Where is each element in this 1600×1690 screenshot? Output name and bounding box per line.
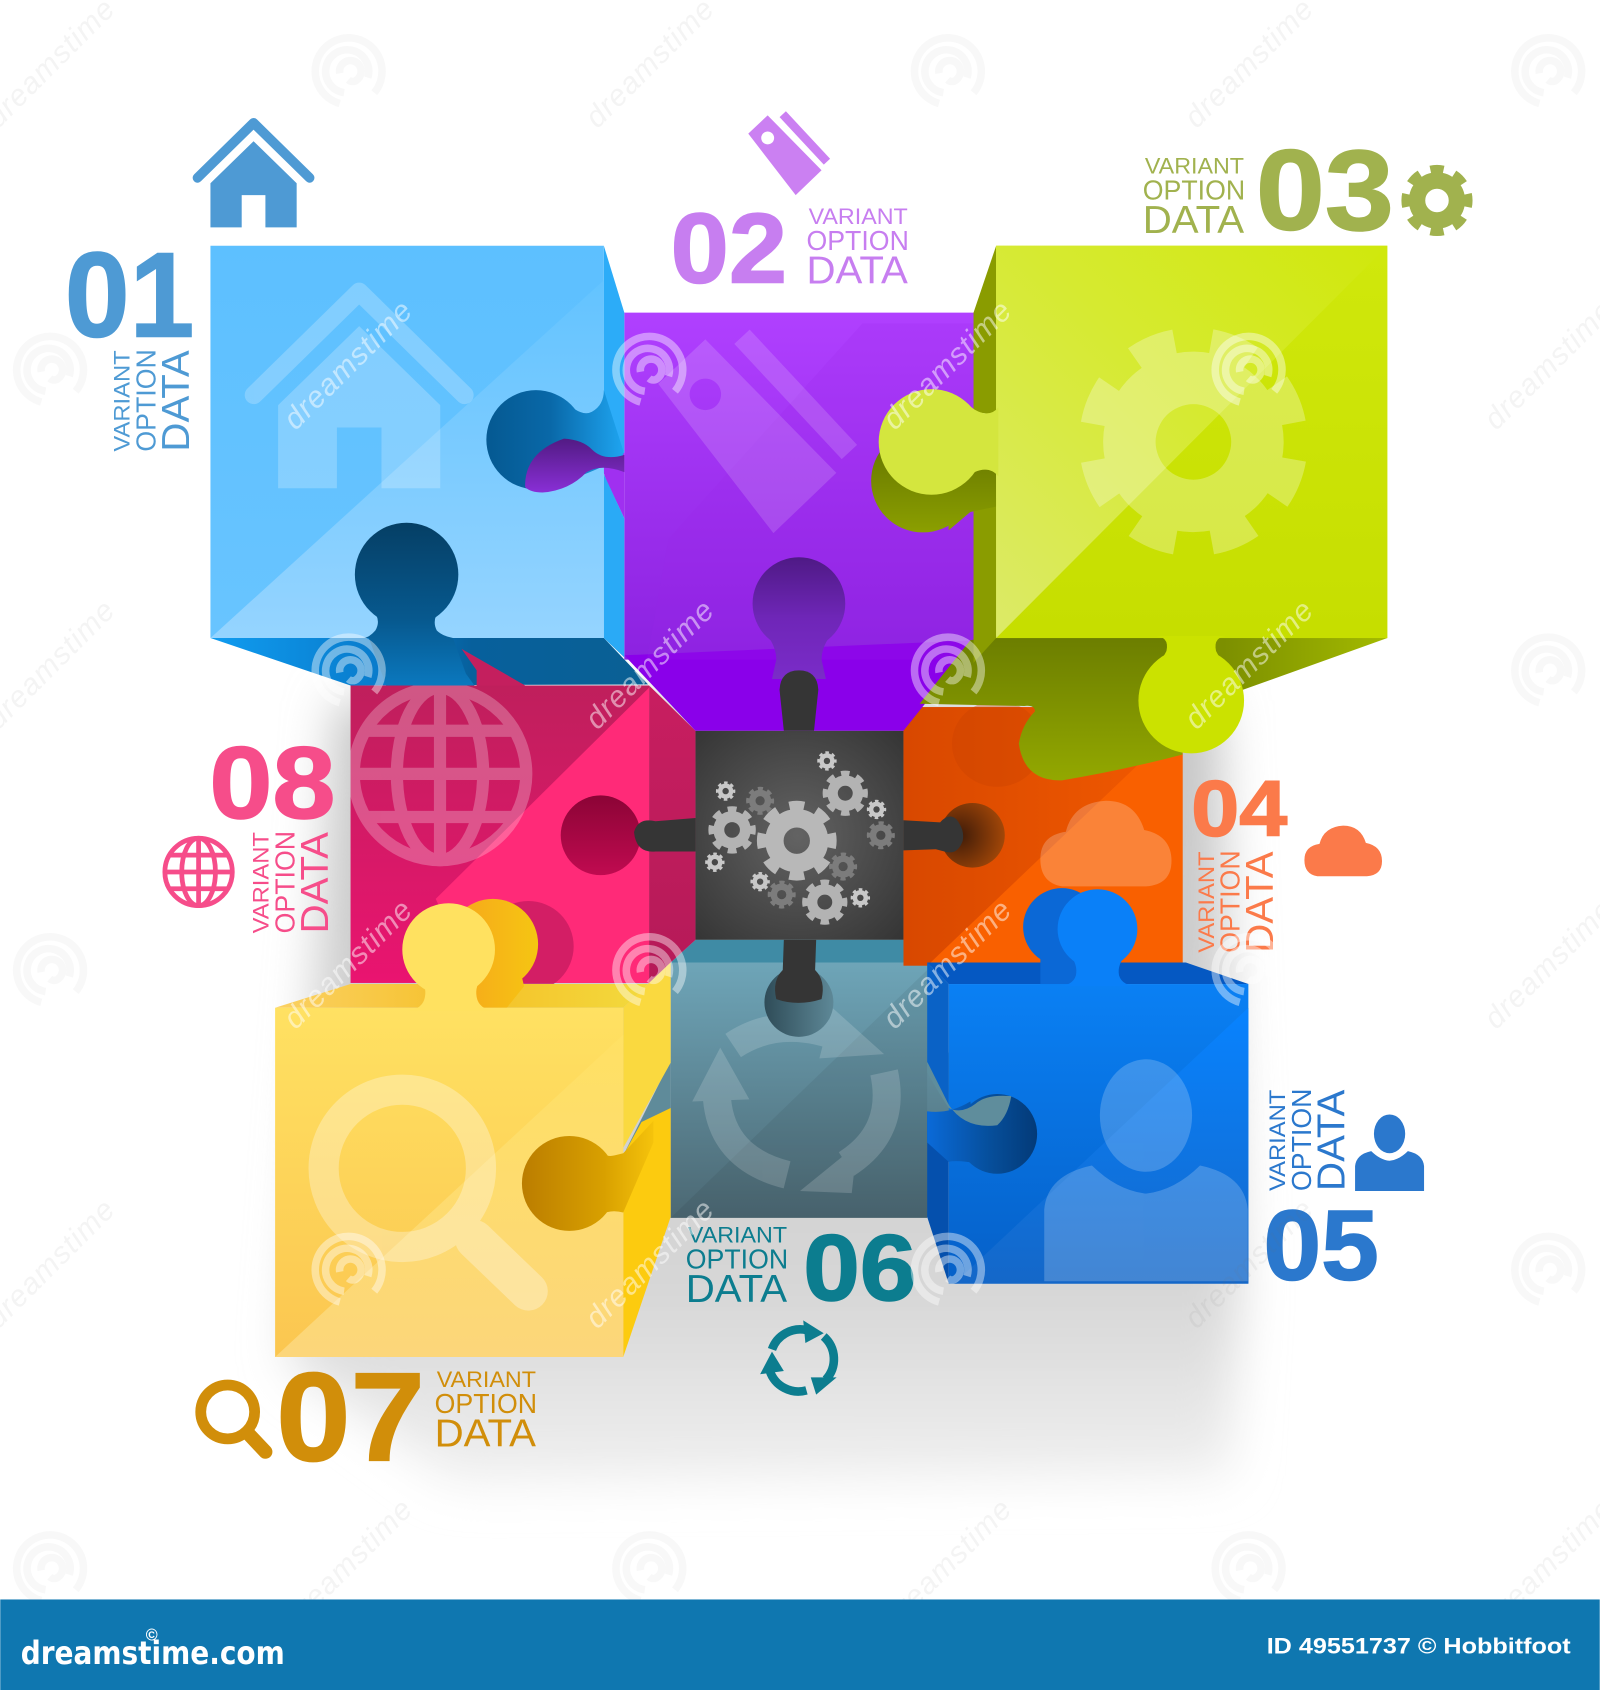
puzzle infographic: dreamstime — [579, 593, 721, 736]
label 08 — [249, 831, 337, 933]
panel: piece 07 yellow — [275, 899, 671, 1357]
footer credit: ID 49551737 © Hobbitfoot — [1267, 1633, 1571, 1658]
label 04: DATA — [1239, 851, 1282, 953]
puzzle infographic: dreamstime — [1178, 593, 1321, 736]
label 03: VARIANT — [1145, 154, 1244, 179]
icon: magnifier — [201, 1385, 265, 1452]
socket: bottom — [355, 523, 475, 685]
label 07 — [435, 1367, 537, 1455]
logo swirl: © — [146, 1626, 158, 1644]
tab shadow — [871, 429, 996, 532]
icon: person — [1355, 1114, 1424, 1191]
label 01 — [110, 349, 198, 452]
icon: cloud — [1304, 826, 1382, 876]
puzzle infographic: dreamstime — [876, 893, 1019, 1035]
label 02: VARIANT — [809, 204, 908, 229]
label 04: VARIANT — [1194, 851, 1219, 953]
icon: card — [748, 114, 827, 195]
panel: piece 08 pink — [351, 685, 695, 992]
label 08: OPTION — [270, 831, 301, 933]
tab top — [402, 903, 495, 1011]
icon: recycle — [760, 1320, 837, 1395]
puzzle infographic: dreamstime — [277, 294, 420, 436]
label 07: VARIANT — [437, 1367, 536, 1392]
label 04: OPTION — [1215, 850, 1246, 953]
socket left — [927, 1094, 1037, 1174]
label 05: DATA — [1310, 1090, 1353, 1191]
icon: house — [198, 123, 310, 227]
panel: piece 06 teal — [623, 940, 951, 1218]
label 02: OPTION — [806, 225, 909, 256]
label 06: VARIANT — [688, 1223, 787, 1248]
icon: house watermark — [254, 292, 465, 488]
label 01: DATA — [155, 350, 198, 452]
label 05: VARIANT — [1265, 1089, 1290, 1191]
icon: gear cluster — [706, 752, 893, 922]
icon: cloud watermark — [1040, 801, 1171, 886]
number 07: 07 — [276, 1346, 425, 1487]
panel: piece 04 orange — [903, 701, 1183, 966]
puzzle infographic: dreamstime — [876, 294, 1019, 436]
label 05 — [1265, 1089, 1353, 1191]
label 04 — [1194, 850, 1282, 953]
number 06: 06 — [803, 1215, 916, 1320]
panel: piece 03 green — [871, 246, 1387, 780]
label 07: DATA — [435, 1412, 536, 1455]
panel: piece 01 blue — [210, 246, 648, 685]
number 05: 05 — [1263, 1190, 1379, 1301]
panel: center gears — [695, 731, 903, 940]
label 03: OPTION — [1143, 174, 1245, 205]
label 08: VARIANT — [249, 832, 274, 933]
teal tab in socket — [927, 1062, 1011, 1126]
label 06: OPTION — [686, 1244, 788, 1275]
tab left — [879, 389, 998, 495]
number 04: 04 — [1191, 764, 1287, 852]
label 02: DATA — [806, 249, 908, 292]
cast shadow — [289, 701, 1240, 1482]
panel: piece 05 blue — [927, 888, 1248, 1284]
icon: globe watermark — [354, 688, 526, 860]
purple tab in socket — [525, 439, 624, 493]
footer bar — [0, 1599, 1600, 1690]
number 08: 08 — [209, 725, 335, 840]
label 06: DATA — [686, 1268, 787, 1311]
puzzle infographic: dreamstime — [876, 1492, 1019, 1635]
label 05: OPTION — [1286, 1089, 1317, 1191]
puzzle infographic: dreamstime — [277, 1492, 420, 1635]
icon: gear watermark — [1064, 312, 1323, 572]
number 01: 01 — [65, 227, 194, 362]
number 02: 02 — [671, 193, 787, 304]
icon: globe — [165, 838, 232, 906]
label 08: DATA — [294, 832, 337, 933]
tab shadow — [448, 899, 538, 1008]
label 06 — [686, 1223, 788, 1311]
socket: right — [486, 390, 623, 489]
tab shadow — [1023, 888, 1101, 986]
tab top — [1057, 889, 1138, 986]
icon: person watermark — [1044, 1059, 1248, 1281]
label 03 — [1143, 154, 1245, 242]
pink wedge — [462, 649, 525, 685]
label 01: VARIANT — [110, 350, 135, 452]
label 01: OPTION — [130, 349, 161, 452]
number 03: 03 — [1256, 128, 1394, 255]
icon: gear — [1406, 170, 1468, 231]
label 02 — [806, 204, 909, 292]
label 07: OPTION — [435, 1388, 537, 1419]
socket right — [522, 1121, 653, 1231]
tab bottom — [1138, 636, 1244, 753]
footer logo: dreamstime.com — [21, 1634, 285, 1672]
puzzle infographic: dreamstime — [579, 1193, 721, 1335]
icon: magnifier watermark — [324, 1090, 528, 1291]
puzzle infographic: dreamstime — [277, 893, 420, 1035]
label 03: DATA — [1143, 199, 1244, 242]
panel: piece 02 purple — [598, 313, 976, 731]
icon: recycle watermark — [692, 1008, 887, 1193]
icon: card watermark — [658, 337, 849, 533]
puzzle infographic: dreamstime — [1178, 1193, 1321, 1335]
